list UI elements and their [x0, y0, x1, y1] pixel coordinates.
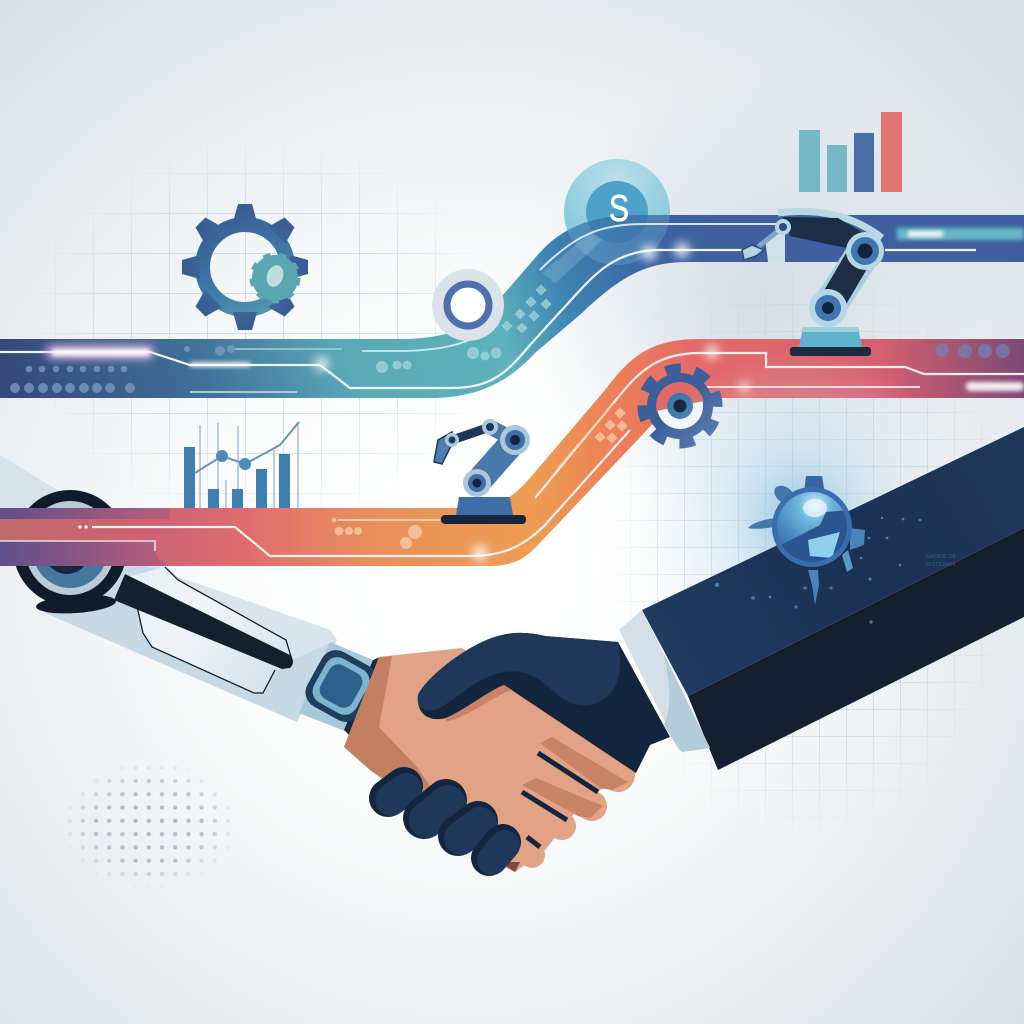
- background grid right: [610, 274, 1002, 833]
- robot wrist: [299, 642, 386, 738]
- pale triangle behind robot arm: [0, 455, 90, 510]
- icon: coin circle behind ribbon: [564, 159, 670, 265]
- dark fingers: [388, 786, 505, 860]
- upper process ribbon: [0, 215, 1024, 398]
- tiny sleeve caption: GASIDE OF: [926, 554, 957, 560]
- icon: ring node on ribbon: [432, 269, 504, 341]
- combo chart: bars and line: [184, 422, 299, 508]
- dollar S label: S: [609, 188, 629, 229]
- dark partner hand: [418, 633, 670, 773]
- suit sleeve: [642, 427, 1024, 770]
- upper robot arm: [742, 211, 884, 356]
- robot arm: shoulder joint: [13, 490, 127, 616]
- cuff: [619, 610, 710, 752]
- coin overlay on ribbon: [564, 159, 670, 265]
- human hand: [344, 648, 636, 872]
- upper ribbon data dots: [10, 345, 235, 393]
- tiny sleeve caption: DISTEXIAN: [926, 562, 955, 568]
- background grid left: [38, 144, 474, 508]
- robot forearm: [45, 540, 337, 722]
- upper ribbon circuit decoration: [0, 224, 1024, 393]
- soft haze behind upper robot: [500, 60, 1024, 540]
- icon: gears: [182, 204, 308, 330]
- halftone dot field: [68, 766, 230, 886]
- glow behind orb gear, clipped to light side: [640, 300, 1024, 611]
- sleeve sparkles: [715, 517, 921, 624]
- tiny sleeve caption: [926, 554, 957, 568]
- icon: gear on lower ribbon: [638, 364, 722, 448]
- lower process ribbon: [0, 339, 1024, 566]
- bar chart: top right: [799, 112, 902, 192]
- lower robot arm: [434, 419, 530, 524]
- lower ribbon circuit decoration: [0, 344, 1024, 566]
- icon: glowing orb gear: [748, 476, 865, 605]
